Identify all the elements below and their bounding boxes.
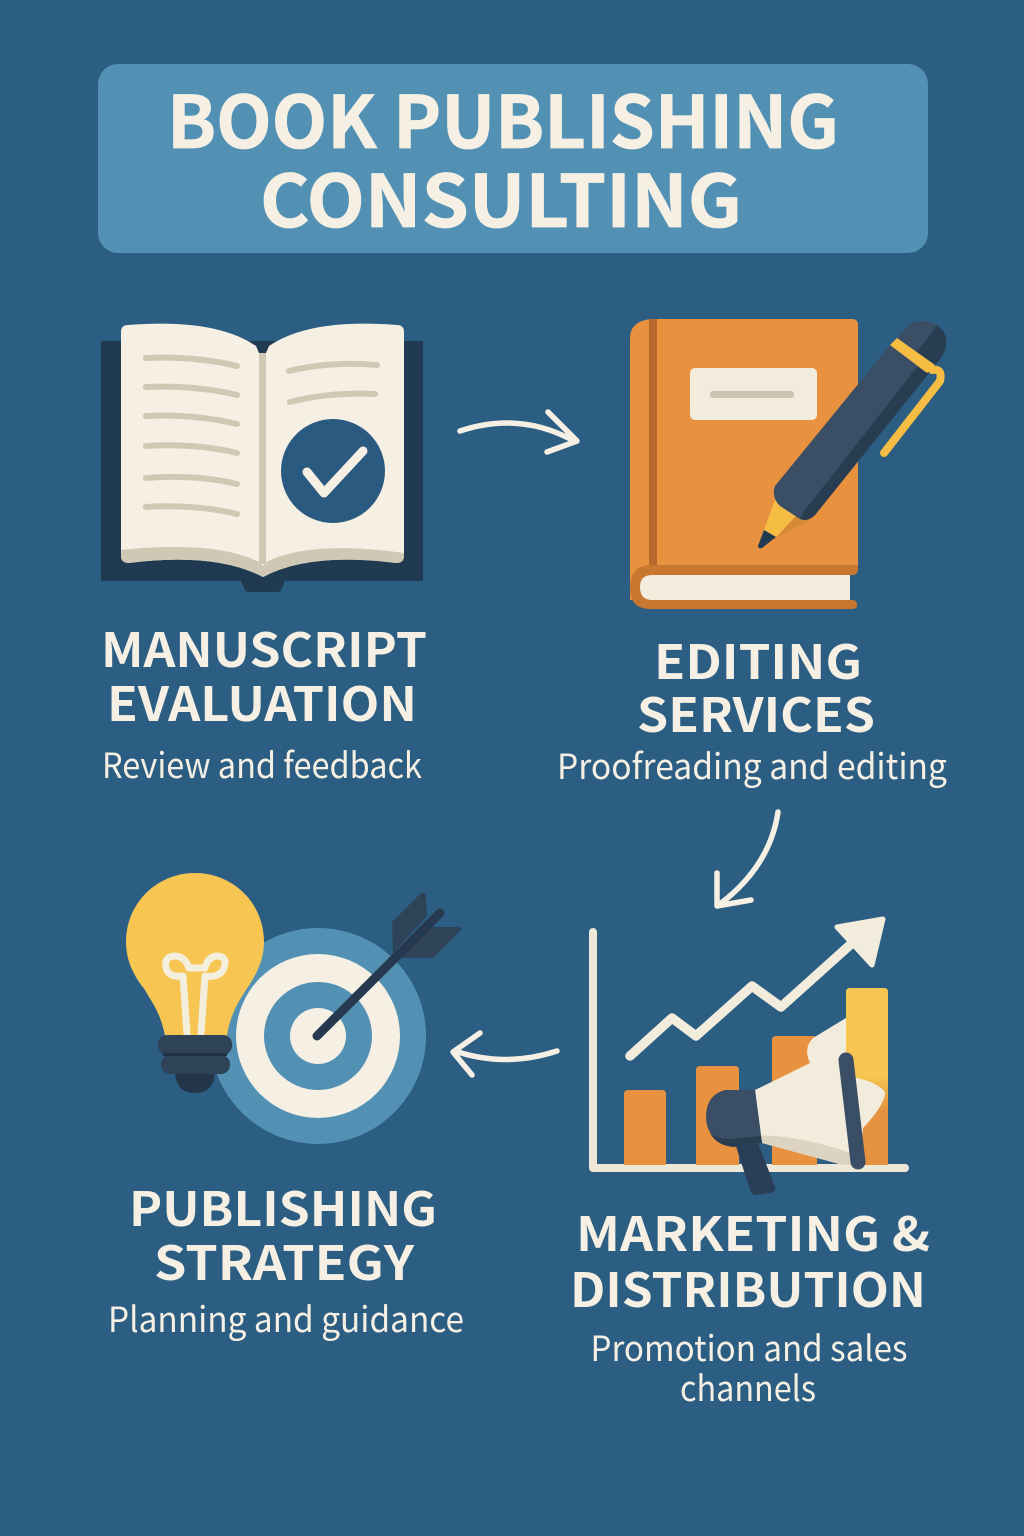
caption: planning and guidance: Planning and guidance	[108, 1292, 464, 1343]
arrow: evaluation to editing	[460, 412, 577, 452]
caption: promotion and sales channels: Promotion and sales	[590, 1321, 908, 1372]
heading: marketing and distribution	[570, 1196, 930, 1321]
arrow: editing to marketing	[717, 812, 778, 906]
caption: promotion and sales channels	[590, 1321, 908, 1412]
caption: proofreading and editing: Proofreading and editing	[557, 739, 947, 790]
icon: check badge	[281, 419, 385, 523]
heading: publishing strategy	[129, 1171, 437, 1294]
heading: editing services	[637, 624, 875, 746]
icon: lightbulb and target	[126, 873, 461, 1144]
icon: orange book with pen	[630, 319, 946, 609]
heading: editing services: EDITING	[654, 624, 862, 693]
trend arrow	[630, 936, 860, 1056]
icon: pen	[758, 321, 946, 548]
heading: publishing strategy: PUBLISHING	[129, 1171, 437, 1240]
heading: manuscript evaluation: EVALUATION	[107, 666, 417, 735]
title banner: CONSULTING	[260, 143, 742, 248]
icon: target	[210, 893, 461, 1144]
icon: marketing chart with megaphone	[593, 919, 905, 1195]
title banner	[98, 64, 928, 253]
icon: megaphone	[706, 1018, 885, 1195]
heading: publishing strategy: STRATEGY	[154, 1225, 415, 1294]
icon: open book with check	[101, 324, 423, 592]
arrow: marketing to strategy	[453, 1033, 557, 1075]
icon: lightbulb	[126, 873, 264, 1093]
heading: manuscript evaluation: MANUSCRIPT	[101, 612, 427, 681]
caption: promotion and sales channels: channels	[680, 1361, 816, 1412]
heading: marketing and distribution: MARKETING &	[576, 1196, 930, 1265]
heading: manuscript evaluation	[101, 612, 427, 735]
title text: BOOK PUBLISHING	[167, 64, 839, 169]
heading: marketing and distribution: DISTRIBUTION	[570, 1252, 926, 1321]
caption: review and feedback: Review and feedback	[102, 738, 422, 789]
heading: editing services: SERVICES	[637, 677, 875, 746]
